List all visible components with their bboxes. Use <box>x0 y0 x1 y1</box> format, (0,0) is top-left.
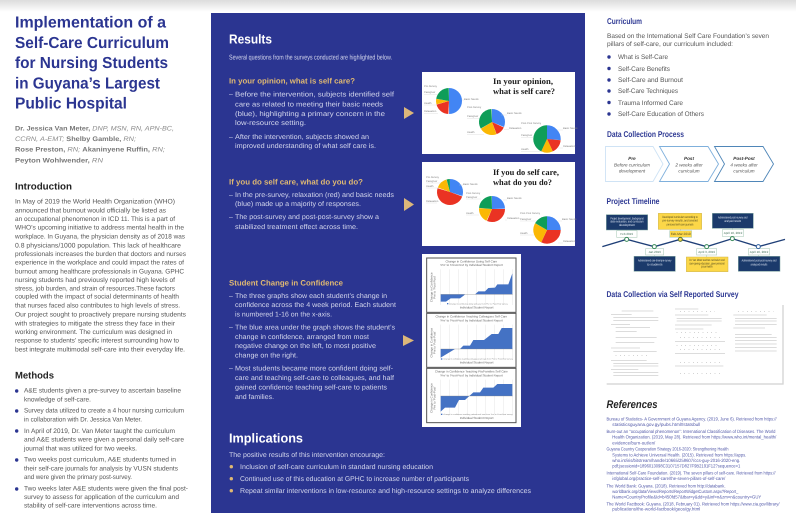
pie labels: Caregiver <box>521 134 532 137</box>
milestone: project development: Feb 2019 <box>620 232 633 236</box>
milestone: post-post-survey: analyzed results <box>751 263 767 266</box>
survey heading: Data Collection via Self Reported Survey <box>606 289 739 299</box>
student change text: change on the right. <box>235 352 298 360</box>
implications list: Inclusion of self-care curriculum in standard nursing education <box>240 464 433 471</box>
question 2 text: – <box>229 214 233 221</box>
data collection process <box>606 129 774 182</box>
chart: what do you do pies: If you do self care, <box>493 168 559 177</box>
pie: pre-survey <box>442 184 458 200</box>
curriculum list: Trauma Informed Care <box>618 100 683 107</box>
milestone: project development: development <box>619 223 635 227</box>
chart: teaching patients and families: Change in Confidence <box>430 383 433 413</box>
student change text: Most students became more confident doing self- <box>235 366 393 372</box>
milestone: post-post-survey: April 16, 2019 <box>750 250 768 254</box>
chart: teaching patients and families <box>427 368 516 423</box>
milestone: post-survey: Administered post-survey and <box>718 216 747 220</box>
introduction body text: 0.8 physicians/1000 population. This lack of healthcare <box>15 242 181 249</box>
chevron: post-post <box>714 146 774 182</box>
question 2 text: In the pre-survey, relaxation (red) and basic needs <box>235 192 395 199</box>
references list: publications/the-world-factbook/geos/gy.html <box>612 507 700 512</box>
timeline heading: Project Timeline <box>606 196 660 206</box>
pie: post-post survey <box>538 130 556 148</box>
methods list <box>15 388 188 510</box>
title: Public Hospital <box>15 96 127 112</box>
chevron: post-post: 4 weeks after <box>730 162 758 168</box>
pie labels: Basic Needs <box>563 127 578 130</box>
references list: The World Factbook: Guyana. (2018, February 01). Retrieved from https://www.cia.gov/library/ <box>606 501 780 506</box>
milestone: pre-survey: to students <box>647 263 662 266</box>
results intro: Several questions from the surveys conducted are highlighted below. <box>229 54 392 61</box>
pie: post-post survey <box>538 221 556 239</box>
arrow: question 1 <box>404 107 414 119</box>
question 2 text: (blue) made up a majority of responses. <box>235 201 361 208</box>
title: in Guyana’s Largest <box>15 76 161 92</box>
pie labels: Health <box>424 102 432 105</box>
pie labels: Relaxation <box>424 110 437 113</box>
chart: what is self care pies: what is self care? <box>493 87 555 96</box>
student change text: is numbered 1-16 on the x-axis. <box>235 312 332 318</box>
question 1 text: – <box>229 91 233 98</box>
chart: doing self care: Change in confidence doing self-care from 'Pre' to 'Post-Post' survey <box>449 303 508 305</box>
pie labels: Post-Post Survey <box>521 122 542 125</box>
introduction body text: In May of 2019 the World Health Organization (WHO) <box>15 199 175 206</box>
references list: Burn-out an “occupational phenomenon”: International Classification of Diseases. The World <box>606 429 776 434</box>
pie: pre-survey <box>441 93 457 109</box>
pie: post-survey <box>483 113 501 131</box>
curriculum list: Self-Care Education of Others <box>618 111 705 118</box>
implications <box>229 430 532 495</box>
curriculum list: Self-Care Benefits <box>618 66 671 73</box>
pie labels: Relaxation <box>509 127 522 130</box>
pie labels: Caregiver <box>424 91 435 94</box>
references list: Health Organization. (2019, May 28). Retrieved from https://www.who.int/mental_health/ <box>612 435 777 440</box>
question 2 text: stabilized treatment effect across time. <box>235 224 358 231</box>
curriculum list: Self-Care Techniques <box>618 88 679 95</box>
introduction body text: with strategies to mitigate the stress they face in their <box>14 320 176 327</box>
introduction body text: experience in the workplace and could impact the rates of <box>15 260 184 267</box>
methods <box>15 370 188 510</box>
student change text: Student Change in Confidence <box>229 279 344 288</box>
pie labels: Post-Survey <box>467 106 482 109</box>
arrow: question 2 <box>404 198 414 211</box>
pie labels: Caregiver <box>426 180 437 183</box>
question 1 text <box>229 77 394 150</box>
project timeline <box>602 196 785 272</box>
pie labels: Relaxation <box>426 200 439 203</box>
methods list: Two weeks post curriculum, A&E students turned in <box>24 457 176 464</box>
milestone: post-post-survey <box>738 245 780 271</box>
pie labels: Health <box>521 148 529 151</box>
milestone: post-survey: analyzed results <box>724 219 741 223</box>
milestone: project development <box>606 215 648 241</box>
references list: The World Bank: Guyana. (2018). Retrieved from http://databank. <box>606 483 726 488</box>
chart: teaching patients and families: Individual Student Report <box>460 416 494 420</box>
milestone: curriculum developed: Developed curriculum according to <box>662 215 698 219</box>
chart: teaching patients and families: 'Pre' to 'Post-Post' by Individual Student Report <box>440 374 503 377</box>
implications intro: The positive results of this intervention encourage: <box>229 452 385 459</box>
question 1 text: low-resource setting. <box>235 120 306 127</box>
chevron: pre <box>606 146 663 182</box>
chevron: post: Post <box>684 156 694 161</box>
pie labels: Pre-Survey <box>424 85 438 88</box>
implications list <box>230 464 532 495</box>
curriculum list: Self-Care and Burnout <box>618 77 683 84</box>
student change text: The blue area under the graph shows the student’s <box>235 324 396 332</box>
chart: teaching patients and families: Change in confidence teaching patients self-care from 'Pre' to 'Post-Post' survey <box>443 414 513 416</box>
introduction body text: workplace. In Guyana, the physician density as of 2018 was <box>14 233 186 240</box>
pie labels: Basic Needs <box>507 197 522 200</box>
introduction body text: response to students’ specific interest surrounding how to <box>15 338 179 345</box>
student change text: negative change on the left, to most positive <box>235 343 376 350</box>
pie labels: Relaxation <box>563 145 576 148</box>
introduction body text: that nurses faced also contributes to high levels of stress. <box>15 302 180 309</box>
introduction heading: Introduction <box>15 182 72 192</box>
student change text: confidence across the 4 week period. Each student <box>235 302 396 309</box>
authors: Rose Preston, RN; Akaninyene Ruffin, RN; <box>15 146 165 154</box>
data collection survey <box>606 289 784 385</box>
authors: Dr. Jessica Van Meter, DNP, MSN, RN, APN-BC, <box>15 126 174 132</box>
introduction body text: stress, job burden, and strain of resources.These factors <box>15 286 176 293</box>
methods list: survey to assess for application of the curriculum and <box>24 494 179 501</box>
pie labels: Pre-Survey <box>426 176 440 179</box>
authors: Peyton Wohlwender, RN <box>15 158 103 164</box>
chevron: post-post: curriculum <box>733 168 755 174</box>
methods list: Survey data utilized to create a 4 hour nursing curriculum <box>24 408 184 415</box>
references list: isfglobal.org/practice-self-care/the-seven-pillars-of-self-care/ <box>612 476 726 481</box>
question 2 text <box>229 178 395 231</box>
methods list: and were given the primary post-survey. <box>24 474 132 481</box>
pie labels: Health <box>520 232 528 235</box>
pie labels: Post-Post Survey <box>520 212 541 215</box>
introduction body text <box>14 199 187 353</box>
references list <box>606 416 780 512</box>
student change text: gained confidence teaching self-care to patients <box>235 384 388 392</box>
student change text: – <box>229 324 233 332</box>
results heading: Results <box>229 32 272 46</box>
chevron: post: 2 weeks after <box>674 162 703 168</box>
milestone: curriculum developed: Feb-Mar 2019 <box>671 232 691 236</box>
methods list: journal that was utilized for two weeks. <box>23 445 137 452</box>
introduction body text: WHO’s upcoming initiative to address mental health in the <box>15 225 184 232</box>
references list: Systems to Achieve Universal Health. (2015). Retrieved from https://apps. <box>612 452 746 457</box>
milestone: post-survey: April 10, 2019 <box>724 231 742 235</box>
curriculum intro: pillars of self-care, our curriculum included: <box>607 41 733 48</box>
curriculum heading: Curriculum <box>607 16 642 26</box>
pie labels: Caregiver <box>467 115 478 118</box>
pie labels: Health <box>466 212 474 215</box>
question 1 text: Before the intervention, subjects identified self <box>235 91 394 98</box>
chart: doing self care <box>427 258 516 312</box>
references <box>606 399 780 512</box>
chart: teaching patients and families: Pre to 'Post-Post' <box>433 386 436 409</box>
curriculum intro: Based on the International Self Care Foundation’s seven <box>607 33 769 40</box>
chevron: post-post: Post-Post <box>733 156 755 161</box>
pie labels: Caregiver <box>520 218 531 221</box>
milestone: curriculum taught: Dr. Van Meter teaches curriculum and <box>689 258 725 262</box>
question 1 text: (blue), highlighting a primary concern in the <box>235 111 385 118</box>
curriculum <box>607 16 769 118</box>
student change text: and families. <box>235 394 274 401</box>
curriculum intro <box>607 33 769 48</box>
milestone: post-post-survey: Administered post-post-survey and <box>742 259 776 263</box>
student change text: The three graphs show each student’s change in <box>235 293 387 300</box>
pie labels: Health <box>467 131 475 134</box>
introduction <box>14 182 187 353</box>
chart: teaching colleagues: Change in confidence teaching colleagues self-care from 'Pre' to 'Post-Post' survey <box>443 358 513 360</box>
pie labels: Relaxation <box>563 240 576 243</box>
milestone: pre-survey: Administered one-time/pre-survey <box>638 259 671 263</box>
chart: teaching colleagues: 'Pre' to 'Post-Post' by Individual Student Report <box>440 319 503 322</box>
chart: doing self care: Change in Confidence Doing Self Care <box>445 260 497 263</box>
chart: doing self care: Change in Confidence <box>430 272 433 302</box>
question 2 text: If you do self care, what do you do? <box>229 178 363 187</box>
chart: doing self care: Individual Student Report <box>460 306 494 309</box>
authors: CCRN, A-EMT; Shelby Gamble, RN; <box>15 136 136 143</box>
chart: teaching colleagues: Pre to 'Post-Post' <box>433 331 436 354</box>
curriculum list: What is Self-Care <box>618 54 668 61</box>
pie labels <box>424 85 578 152</box>
title: Implementation of a <box>15 14 166 32</box>
chevron: post <box>660 146 718 182</box>
pie labels: Basic Needs <box>507 112 522 115</box>
milestone: curriculum taught <box>686 245 728 272</box>
chart: teaching colleagues: Individual Student Report <box>460 361 494 364</box>
chart: what is self care pies: In your opinion, <box>493 77 553 86</box>
curriculum list <box>607 54 705 118</box>
introduction body text: best integrate multimodal self-care into their everyday life. <box>15 346 185 353</box>
question 2 text: – <box>229 192 233 199</box>
implications heading: Implications <box>229 430 303 446</box>
references list: worldbank.org/data/Views/Reports/ReportWidgetCustom.aspx?Report_ <box>612 489 739 494</box>
student change text: care and teaching self-care to colleagues, and half <box>235 375 394 382</box>
pie labels: Post-Survey <box>466 192 481 195</box>
pie labels: Caregiver <box>466 196 477 199</box>
pie labels: Basic Needs <box>464 98 479 101</box>
title: for Nursing Students <box>15 55 168 72</box>
references list: International Self-Care Foundation. (2019). The seven pillars of self-care. Retrieved from https:// <box>606 470 776 475</box>
chart: teaching colleagues: Change in Confidence Teaching Colleagues Self Care <box>436 315 507 318</box>
student change text <box>229 279 396 401</box>
methods list: their self-care journals for analysis by VUSN students <box>24 465 179 472</box>
title <box>15 14 169 112</box>
references list: Guyana Country Cooperation Strategy 2016-2020: Strengthening Health <box>606 446 729 451</box>
references list: Bureau of Statistics- A Government of Guyana Agency. (2019, June 6). Retrieved from https:// <box>606 416 777 422</box>
timeline diagram <box>602 213 785 272</box>
milestone: post-survey <box>712 213 753 241</box>
chevron: pre: development <box>619 168 646 174</box>
references heading: References <box>606 399 658 411</box>
question 1 text: In your opinion, what is self care? <box>229 77 355 86</box>
chart: what do you do pies <box>422 162 577 246</box>
milestone: curriculum developed <box>658 213 702 241</box>
introduction body text: working environment. The curriculum was designed in <box>14 329 172 336</box>
title: Self-Care Curriculum <box>15 35 169 52</box>
methods list: and A&E students were given a personal daily self-care <box>24 437 184 444</box>
milestone: project development: data evaluation, and curriculum <box>610 220 644 224</box>
methods list: in collaboration with Dr. Jessica Van Meter. <box>24 416 142 423</box>
pie: post-survey <box>483 200 501 218</box>
pie labels <box>426 176 577 243</box>
chart: teaching colleagues <box>427 313 516 367</box>
chart group: confidence area charts <box>422 254 521 427</box>
methods list: In April of 2019, Dr. Van Meter taught the curriculum <box>24 428 175 435</box>
chart: teaching patients and families: Change in Confidence Teaching Pts/Families Self Care <box>435 370 508 373</box>
introduction body text: nursing students had previously reported high levels of <box>15 277 175 284</box>
question 1 text: improved understanding of what self care is. <box>235 143 376 150</box>
student change text: – <box>229 293 233 300</box>
methods list: A&E students given a pre-survey to ascertain baseline <box>24 388 181 395</box>
milestone: curriculum taught: April 3, 2019 <box>698 250 715 254</box>
student change text: – <box>229 366 233 372</box>
implications list: Continued use of this education at GPHC to increase number of participants <box>240 476 470 483</box>
process heading: Data Collection Process <box>607 129 684 139</box>
introduction body text: burnout among healthcare professionals in Guyana. GPHC <box>15 268 184 275</box>
implications list: Repeat similar interventions in low-resource and high-resource settings to analyze differences <box>240 488 532 495</box>
references list: statisticsguyana.gov.gy/pubs.html#statsbull <box>612 422 700 427</box>
chart: teaching colleagues: Change in Confidence <box>430 328 433 358</box>
introduction body text: announced that burnout would officially be listed as <box>15 207 167 214</box>
references list: pdf;jsessionid=1896013098C3107157D827F9B2191F12?sequence=1 <box>612 464 741 469</box>
methods list: knowledge of self-care. <box>24 396 91 403</box>
milestone: curriculum taught: journals <box>701 265 713 269</box>
chart: what do you do pies: what do you do? <box>493 178 552 187</box>
chevron: post: curriculum <box>678 168 700 174</box>
references list: who.int/iris/bitstream/handle/10665/258607/ccs-guy-2016-2020-eng. <box>612 458 740 463</box>
chevron: pre: Pre <box>628 156 636 161</box>
question 1 text: After the intervention, subjects showed an <box>235 134 369 141</box>
arrow: student change <box>403 335 414 346</box>
student change text: change in confidence, arranged from most <box>235 334 369 341</box>
question 1 text: care as related to meeting their basic needs <box>235 101 384 108</box>
introduction body text: professionals increases the burden that doctors and nurses <box>15 251 187 258</box>
milestone: curriculum developed: personal self-care journals <box>667 223 693 226</box>
milestone: pre-survey: Jan 2019 <box>648 250 661 254</box>
survey image <box>606 304 784 385</box>
milestone: pre-survey <box>634 245 675 271</box>
pie labels: Health <box>426 185 434 188</box>
authors <box>15 126 174 164</box>
chart: doing self care: 'Pre' to 'Post-Post' by Individual Student Report <box>440 263 503 267</box>
references list: Name=CountryProfile&Id=b450fd57&tbar=y&dd=y&inf=n&zm=n&country=GUY <box>612 494 761 499</box>
methods heading: Methods <box>15 370 54 382</box>
panel: results and implications <box>211 13 585 513</box>
question 2 text: The post-survey and post-post-survey show a <box>235 214 379 221</box>
pie labels: Relaxation <box>507 217 520 220</box>
methods list: Two weeks later A&E students were given the final post- <box>24 485 188 492</box>
introduction body text: an occupational phenomenon in ICD 11. This is a part of <box>15 216 175 223</box>
methods list: stability of self-care interventions across time. <box>24 503 157 510</box>
pie labels: Basic Needs <box>463 183 478 186</box>
chevron: pre: Before curriculum <box>614 162 650 168</box>
introduction body text: Our project sought to proactively prepare nursing students <box>15 312 187 319</box>
chart: what is self care pies <box>422 72 578 154</box>
milestone: curriculum developed: pre-survey results, and created <box>662 219 698 223</box>
chart: doing self care: Pre to 'Post-Post' <box>433 276 436 299</box>
introduction body text: coupled with the impact of social determinants of health <box>15 294 179 301</box>
references list: evidence/burn-out/en/ <box>612 440 656 445</box>
pie labels: Basic Needs <box>562 218 577 221</box>
milestone: project development: Project development, background <box>610 217 644 220</box>
milestone: curriculum taught: care-giving education, gave personal <box>689 262 725 265</box>
question 1 text: – <box>229 134 233 141</box>
